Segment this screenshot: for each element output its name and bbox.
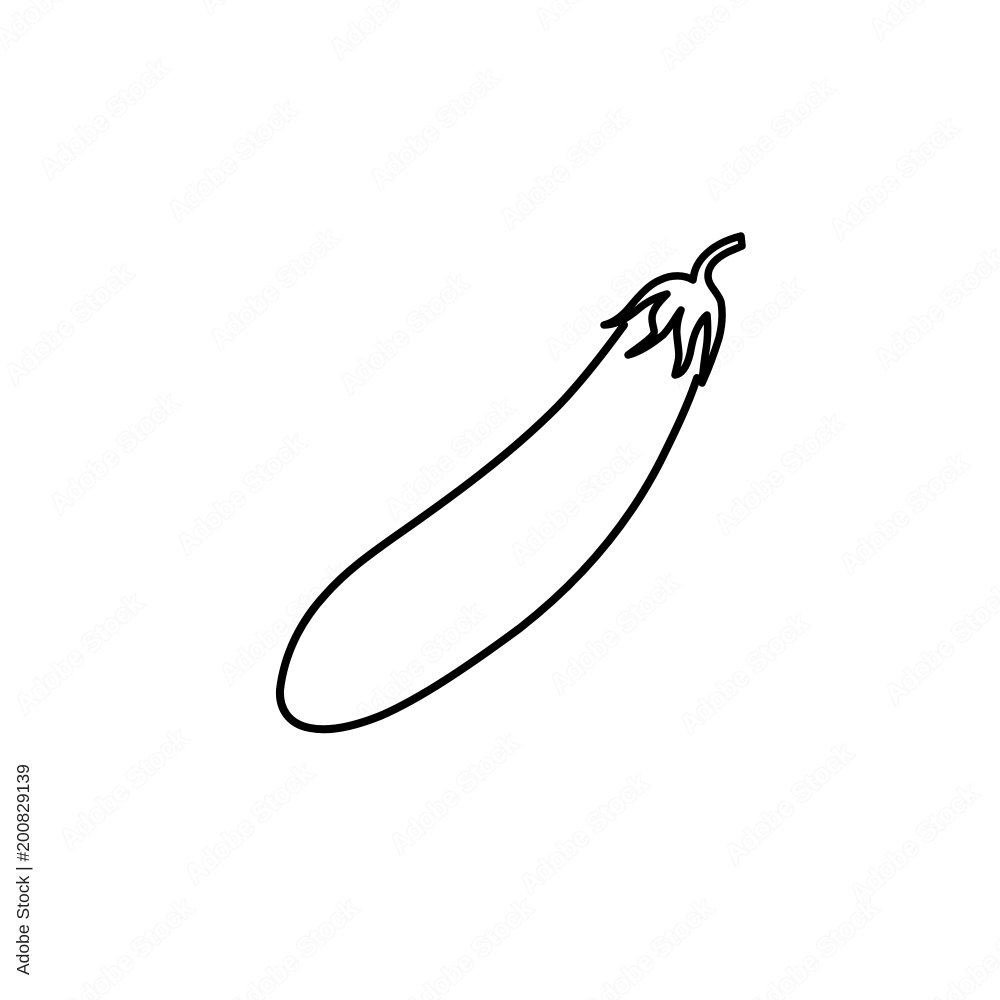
watermark pattern: Adobe Stock: [44, 388, 184, 519]
watermark pattern: Adobe Stock: [171, 428, 311, 559]
watermark pattern: Adobe Stock: [699, 73, 839, 204]
watermark pattern: Adobe Stock: [709, 408, 849, 539]
eggplant cap and stem outline: [604, 236, 742, 383]
watermark pattern: Adobe Stock: [349, 598, 489, 729]
watermark pattern: Adobe Stock: [214, 558, 354, 689]
watermark pattern: Adobe Stock: [834, 448, 974, 579]
watermark pattern: Adobe Stock: [364, 63, 504, 194]
watermark pattern: Adobe Stock: [669, 273, 809, 404]
watermark pattern: Adobe Stock: [9, 588, 149, 719]
watermark pattern: Adobe Stock: [674, 608, 814, 739]
watermark pattern: Adobe Stock: [179, 758, 319, 889]
eggplant body outline: [280, 325, 697, 729]
watermark pattern: Adobe Stock: [844, 778, 984, 909]
watermark pattern: Adobe Stock: [504, 438, 644, 569]
watermark pattern: Adobe Stock: [544, 568, 684, 699]
watermark pattern: Adobe Stock: [0, 258, 139, 389]
watermark pattern: Adobe Stock: [162, 95, 302, 226]
watermark pattern: Adobe Stock: [824, 113, 964, 244]
watermark pattern: Adobe Stock: [539, 233, 679, 364]
icon: eggplant line drawing: [280, 236, 742, 729]
stock credit: Adobe Stock | #200829139: [13, 764, 33, 975]
watermark pattern: Adobe Stock: [384, 728, 524, 859]
watermark pattern: Adobe Stock: [494, 103, 634, 234]
watermark pattern: Adobe Stock: [54, 723, 194, 854]
watermark pattern: Adobe Stock: [514, 768, 654, 899]
watermark pattern: Adobe Stock: [719, 738, 859, 869]
watermark pattern: Adobe Stock: [34, 53, 174, 184]
watermark pattern: Adobe Stock: [204, 223, 344, 354]
watermark pattern: Adobe Stock: [334, 268, 474, 399]
watermark pattern: Adobe Stock: [379, 393, 519, 524]
